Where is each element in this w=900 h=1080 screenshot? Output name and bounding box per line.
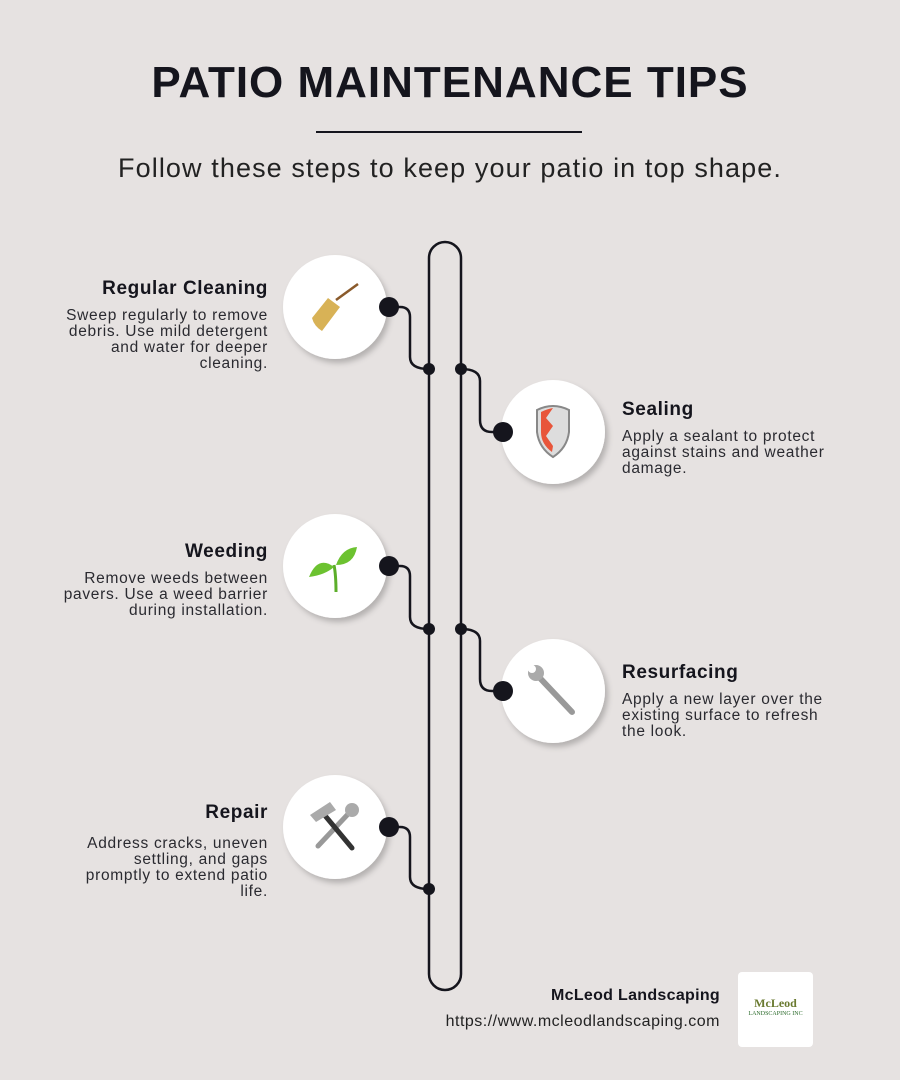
step: Sealing — [622, 399, 825, 477]
step: Repair: life. — [240, 883, 268, 900]
step: Repair — [86, 802, 268, 900]
step: Sealing: damage. — [622, 460, 687, 477]
track — [429, 242, 461, 990]
step: Resurfacing: the look. — [622, 723, 687, 740]
step: Weeding: Remove weeds between — [84, 570, 268, 587]
step: Repair: Address cracks, uneven — [87, 835, 268, 852]
circles — [283, 255, 605, 879]
step: Weeding: during installation. — [129, 602, 268, 619]
step: Weeding — [64, 541, 268, 619]
icon: hammer and wrench — [310, 802, 359, 848]
step: Weeding: Weeding — [185, 541, 268, 562]
step: Resurfacing: Apply a new layer over the — [622, 691, 823, 708]
step: Repair: Repair — [205, 802, 268, 823]
step: Sealing: Apply a sealant to protect — [622, 428, 815, 445]
footer: company: https://www.mcleodlandscaping.com — [446, 1013, 720, 1030]
icon: sprout — [309, 547, 357, 592]
footer: logo: McLeod — [754, 996, 797, 1010]
step: Repair: promptly to extend patio — [86, 867, 268, 884]
footer: company — [446, 987, 720, 1030]
icon: shield — [537, 406, 569, 457]
title: PATIO MAINTENANCE TIPS — [151, 58, 749, 107]
step: Regular Cleaning: debris. Use mild detergent — [69, 323, 268, 340]
step: Regular Cleaning: and water for deeper — [111, 339, 268, 356]
step: Repair: settling, and gaps — [134, 851, 268, 868]
step: Resurfacing: Resurfacing — [622, 662, 738, 683]
step: Resurfacing: existing surface to refresh — [622, 707, 818, 724]
step: Regular Cleaning: Sweep regularly to remove — [66, 307, 268, 324]
icon: broom — [312, 284, 358, 331]
footer: logo — [738, 972, 813, 1047]
step: Sealing: Sealing — [622, 399, 694, 420]
icon: wrench — [528, 665, 572, 712]
step: Resurfacing — [622, 662, 823, 740]
subtitle: Follow these steps to keep your patio in top shape. — [118, 153, 782, 183]
step: Regular Cleaning: cleaning. — [200, 355, 268, 372]
step: Regular Cleaning — [66, 278, 268, 372]
step: Sealing: against stains and weather — [622, 444, 825, 461]
connectors — [389, 307, 503, 889]
dots — [379, 297, 513, 895]
footer: logo: LANDSCAPING INC — [748, 1011, 803, 1017]
footer: company: McLeod Landscaping — [551, 987, 720, 1004]
step: Weeding: pavers. Use a weed barrier — [64, 586, 268, 603]
step: Regular Cleaning: Regular Cleaning — [102, 278, 268, 299]
